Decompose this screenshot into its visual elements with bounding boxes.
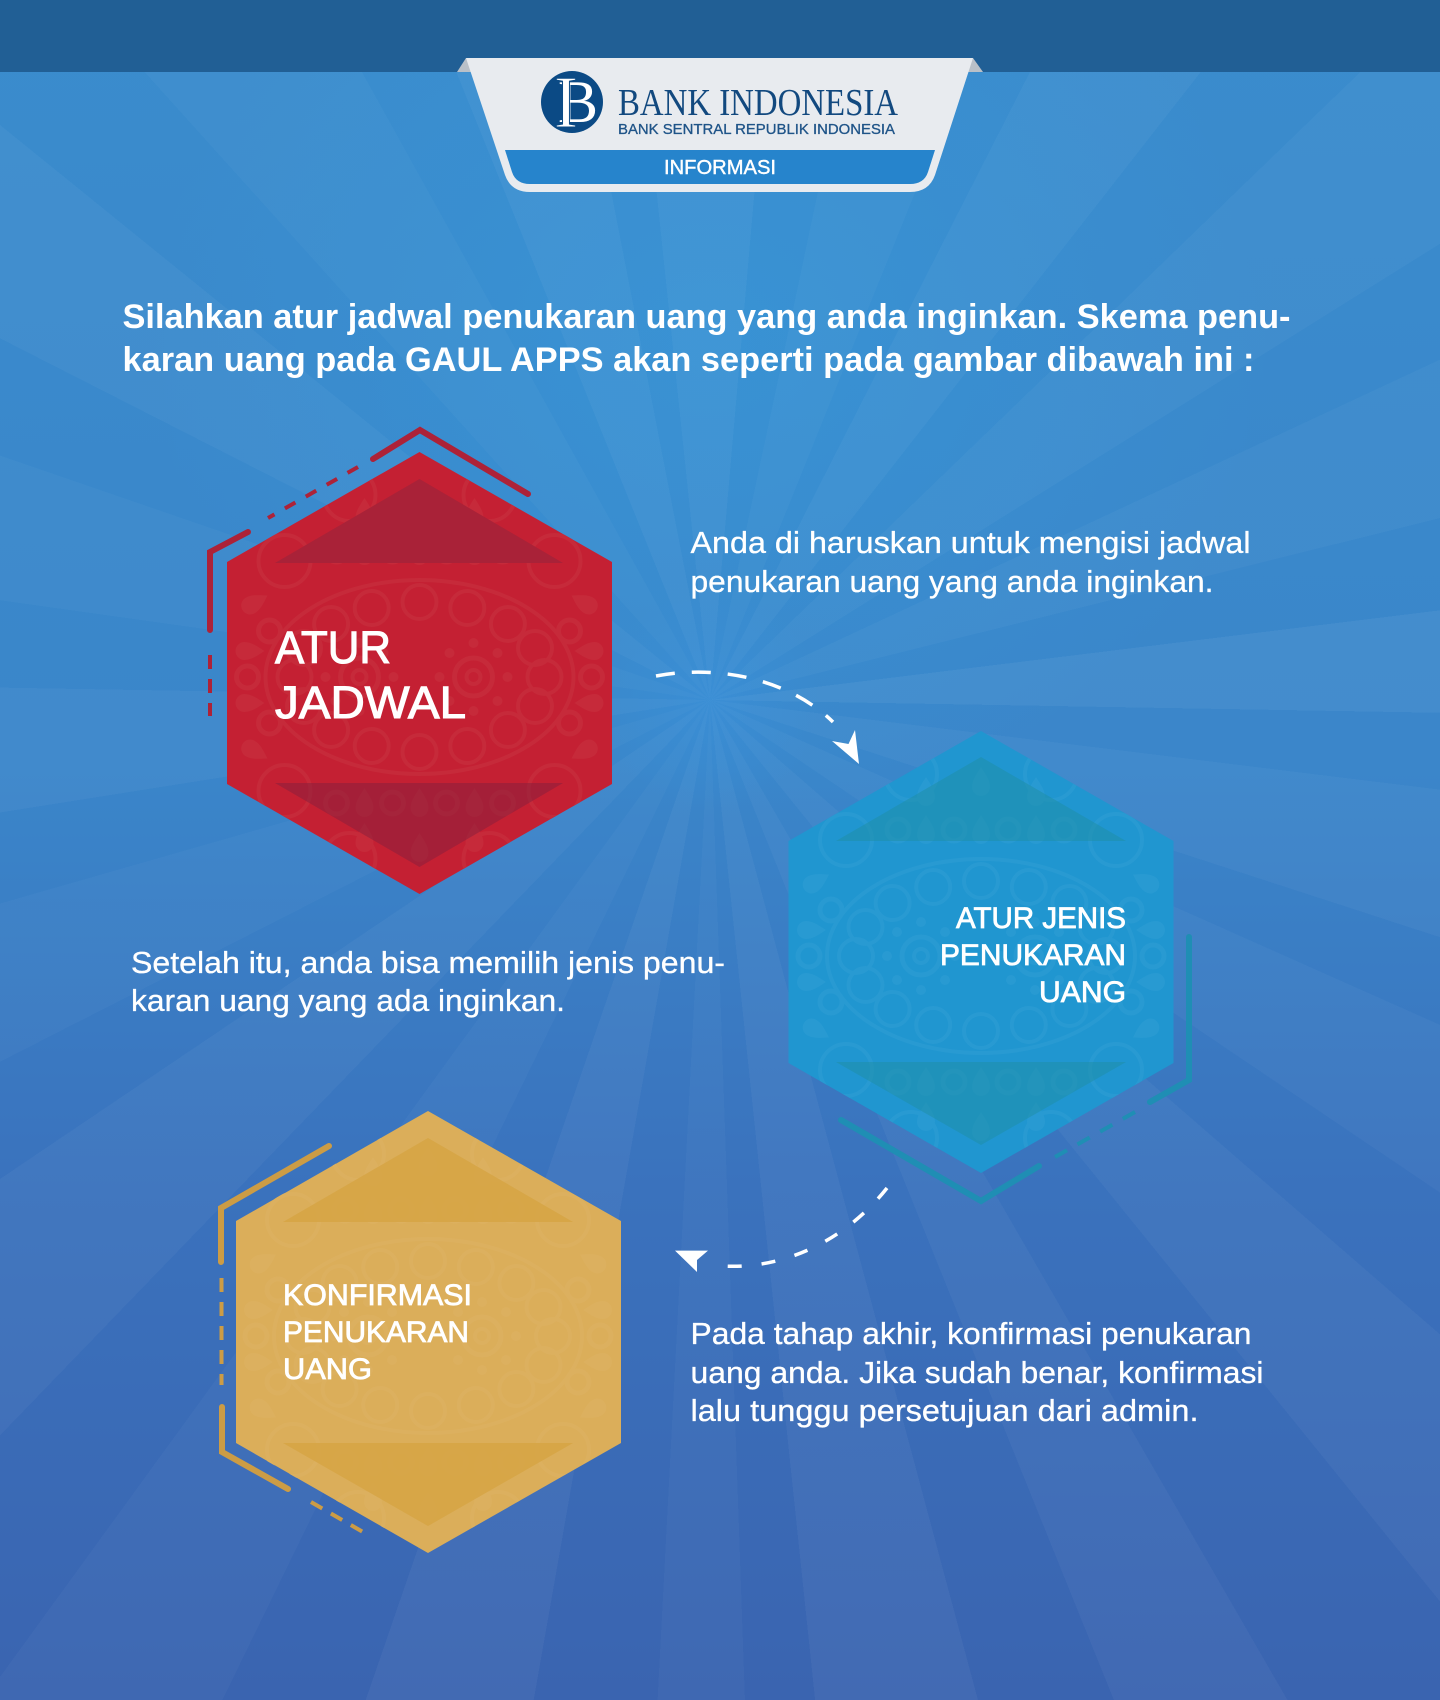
label: PENUKARAN: [283, 1316, 469, 1349]
top header band: [0, 0, 1440, 72]
icon: bank indonesia emblem: [541, 62, 603, 144]
intro heading: [122, 298, 1290, 379]
label: [275, 622, 466, 728]
step 3 description: [690, 1316, 1264, 1428]
label: ATUR JENIS: [956, 902, 1126, 935]
step 1 description: penukaran uang yang anda inginkan.: [690, 564, 1214, 599]
top shade: [283, 1138, 573, 1222]
step 2 description: Setelah itu, anda bisa memilih jenis penu-: [131, 945, 725, 980]
bottom shade: [283, 1443, 573, 1526]
top shade: [836, 757, 1126, 841]
hexagon body: [227, 452, 612, 894]
informasi band: [505, 150, 935, 184]
arrow: step 1 to step 2: [656, 672, 859, 764]
step 2 description: karan uang yang ada inginkan.: [131, 983, 565, 1018]
intro heading: karan uang pada GAUL APPS akan seperti pada gambar dibawah ini :: [122, 341, 1254, 379]
label: [283, 1279, 472, 1386]
label: UANG: [283, 1353, 372, 1386]
label: [940, 902, 1126, 1009]
label: ATUR: [275, 622, 391, 673]
dashed outline: [221, 1146, 363, 1532]
bank tagline: BANK SENTRAL REPUBLIK INDONESIA: [618, 122, 895, 138]
top shade: [275, 479, 563, 563]
hexagon body: [788, 731, 1174, 1173]
step 3 hexagon: konfirmasi penukaran uang: [221, 1111, 621, 1553]
dashed outline: [841, 937, 1189, 1201]
ribbon folds: [457, 58, 983, 72]
label: JADWAL: [275, 677, 466, 728]
label: UANG: [1039, 976, 1126, 1009]
bottom shade: [836, 1062, 1126, 1145]
label: KONFIRMASI: [283, 1279, 472, 1312]
mandala pattern: [244, 1128, 612, 1544]
bottom shade: [275, 783, 563, 867]
step 3 description: uang anda. Jika sudah benar, konfirmasi: [690, 1355, 1264, 1390]
informasi band: INFORMASI: [664, 157, 776, 179]
step 1 description: [690, 525, 1250, 599]
icon: bank indonesia emblem: I: [554, 62, 578, 144]
step 3 description: Pada tahap akhir, konfirmasi penukaran: [690, 1316, 1252, 1351]
step 1 description: Anda di haruskan untuk mengisi jadwal: [690, 525, 1250, 560]
intro heading: Silahkan atur jadwal penukaran uang yang anda inginkan. Skema penu-: [122, 298, 1290, 336]
logo ribbon: [457, 58, 983, 192]
arrow: step 2 to step 3: [675, 1188, 887, 1272]
bank name: BANK INDONESIA: [618, 82, 898, 124]
hexagon body: [236, 1111, 621, 1553]
dashed outline: [210, 430, 528, 716]
step 1 hexagon: atur jadwal: [210, 430, 612, 894]
mandala pattern: [797, 748, 1165, 1164]
mandala pattern: [236, 469, 604, 885]
step 2 hexagon: atur jenis penukaran uang: [788, 731, 1189, 1201]
icon: bank indonesia emblem: B: [558, 69, 598, 135]
ribbon panel: [466, 58, 973, 192]
step 2 description: [131, 945, 725, 1018]
label: PENUKARAN: [940, 939, 1126, 972]
step 3 description: lalu tunggu persetujuan dari admin.: [690, 1393, 1198, 1428]
